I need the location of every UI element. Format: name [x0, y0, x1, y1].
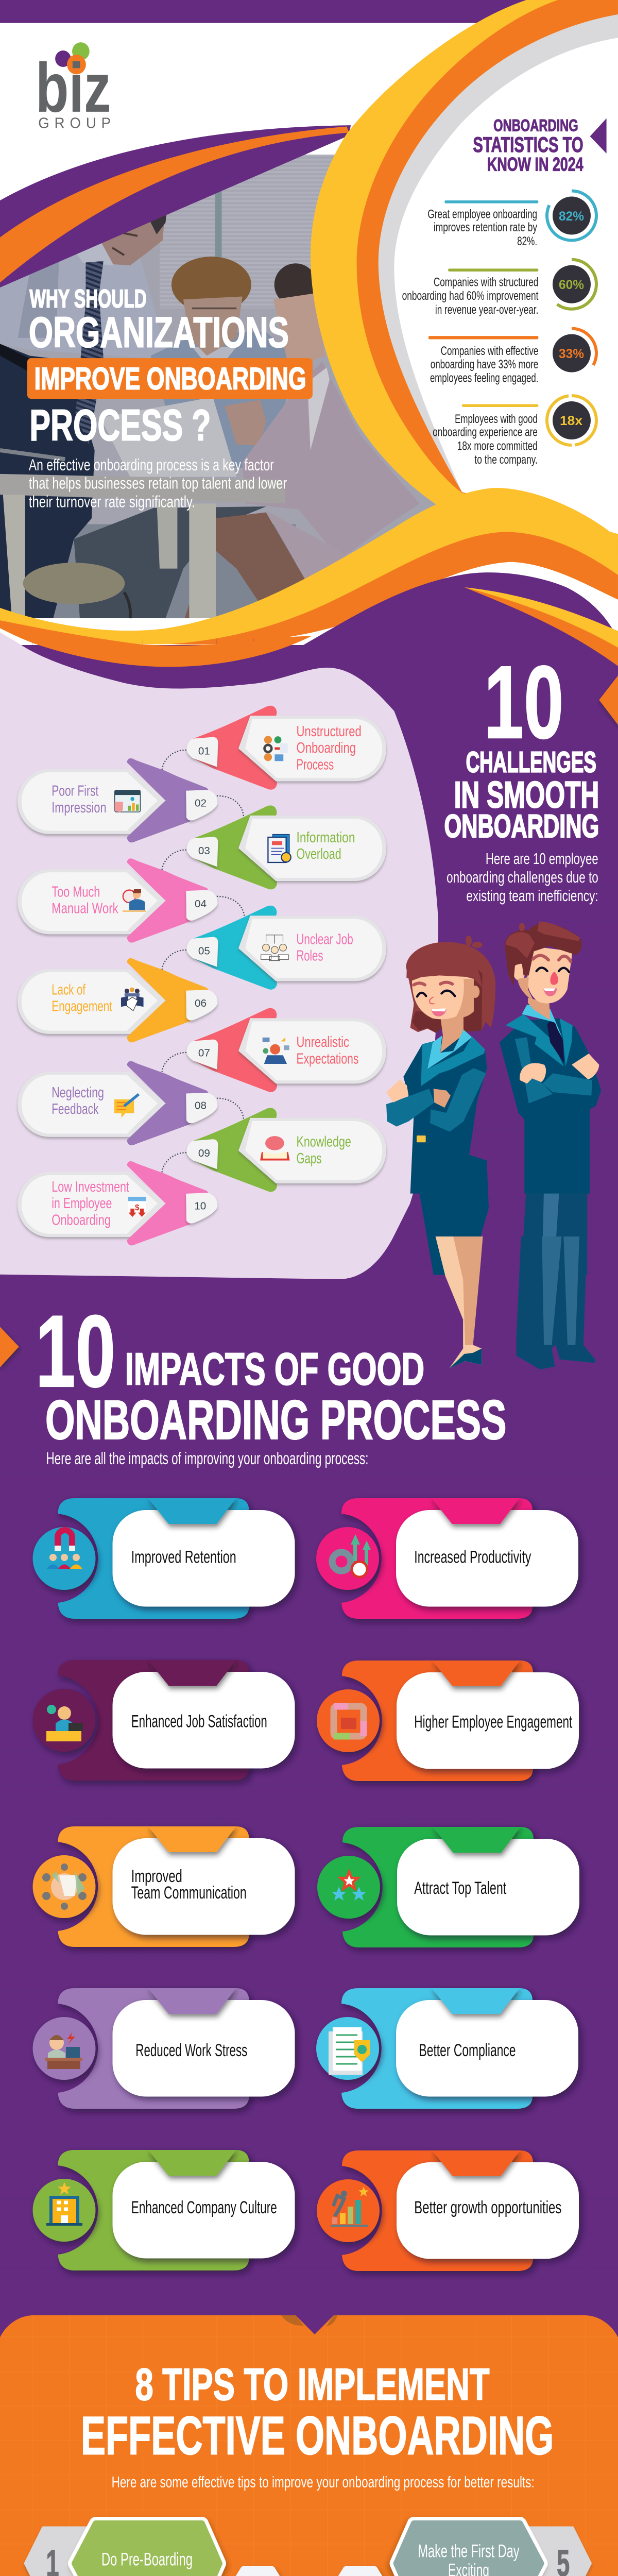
- grey arc: [379, 14, 618, 534]
- challenge 05: 05: [198, 945, 210, 957]
- orange arc: [357, 0, 618, 534]
- challenge 02: [18, 758, 217, 842]
- stat ring 33%: [547, 329, 596, 378]
- stat 1 text: Great employee onboarding: [427, 207, 537, 221]
- card: improved team communication: Improved: [131, 1867, 182, 1886]
- card: better growth opportunities: Better growth opportunities: [414, 2198, 561, 2217]
- section title: 10 impacts of good onboarding process: [36, 1294, 506, 1468]
- challenge 08: Neglecting: [52, 1084, 104, 1101]
- top white mask: [0, 0, 473, 201]
- stats heading: KNOW IN 2024: [487, 154, 583, 175]
- challenge 07: Unrealistic: [297, 1034, 349, 1050]
- white wave: [0, 562, 618, 657]
- card: enhanced company culture: [33, 2150, 295, 2270]
- stat 4 text: to the company.: [474, 453, 538, 466]
- intro text: An effective onboarding process is a key factor: [29, 455, 274, 474]
- challenge 05: Unclear Job: [297, 931, 353, 947]
- hero photo: three colleagues around a laptop: [0, 155, 464, 618]
- stat 2 text: [402, 268, 539, 316]
- stat 2 text: Companies with structured: [434, 275, 538, 289]
- stat 3 text: onboarding have 33% more: [431, 358, 538, 371]
- challenge 04: Too Much: [52, 884, 100, 901]
- challenge 06: [18, 958, 217, 1042]
- challenge 03: Information: [297, 829, 355, 846]
- challenge 07: 07: [198, 1047, 210, 1059]
- stat 4 text: onboarding experience are: [433, 425, 538, 439]
- challenge 07: Expectations: [297, 1050, 358, 1067]
- character lower: woman skirt and man trousers: [414, 1137, 587, 1275]
- stat 3 text: [428, 336, 538, 384]
- orange wave: [169, 532, 618, 657]
- challenge 08: [18, 1061, 217, 1145]
- stat 1 text: improves retention rate by: [434, 220, 537, 234]
- challenge 01: 01: [198, 745, 210, 757]
- challenge 09: Gaps: [297, 1150, 321, 1167]
- card: attract top talent: [317, 1827, 579, 1947]
- card: better compliance: [316, 1988, 578, 2109]
- orange tips section background: [0, 2315, 618, 2576]
- stat ring 33%: 33%: [559, 347, 584, 361]
- challenge 01: Onboarding: [297, 740, 356, 756]
- stat ring 60%: [547, 260, 596, 309]
- stat ring 82%: 82%: [559, 209, 584, 224]
- challenge 03: [186, 805, 386, 889]
- challenge 05: [186, 906, 386, 990]
- intro text: that helps businesses retain top talent and lower: [29, 474, 287, 493]
- yellow wave: [0, 488, 618, 657]
- logo: biz group: GROUP: [38, 115, 111, 131]
- card: better growth opportunities: [317, 2150, 579, 2271]
- challenge 10: $: [135, 1204, 140, 1212]
- card: improved retention: [33, 1498, 295, 1619]
- intro text: [29, 455, 287, 511]
- section title: 10 challenges in smooth onboarding: [444, 645, 599, 844]
- stat ring 18x: 18x: [560, 414, 582, 428]
- purple grid texture: [0, 639, 618, 2315]
- stat 2 text: onboarding had 60% improvement: [402, 289, 539, 302]
- stats heading: ONBOARDING: [493, 116, 578, 134]
- challenge 10: Onboarding: [52, 1212, 111, 1228]
- stat ring 82%: [547, 191, 596, 240]
- purple spike: yellow and orange: [465, 587, 618, 666]
- challenge 09: Knowledge: [297, 1134, 351, 1150]
- challenge 09: [186, 1108, 386, 1192]
- orange left swoosh: [0, 127, 349, 282]
- title: why should organizations improve onboarding process: ORGANIZATIONS: [29, 309, 289, 357]
- hero curves and statistics panel: [0, 0, 618, 657]
- main purple background: [0, 572, 618, 2370]
- challenge 06: 06: [195, 997, 207, 1009]
- title: why should organizations improve onboarding process: IMPROVE ONBOARDING: [35, 361, 306, 396]
- challenge 08: Feedback: [52, 1101, 99, 1117]
- section title: 10 impacts of good onboarding process: IMPACTS OF GOOD: [125, 1343, 424, 1395]
- challenge 09: 09: [198, 1147, 210, 1159]
- title: why should organizations improve onboarding process: WHY SHOULD: [29, 284, 147, 313]
- challenge 10: [18, 1161, 217, 1245]
- tip 5: make the first day exciting: [329, 2523, 590, 2576]
- challenge 08: 08: [195, 1099, 207, 1111]
- card: reduced work stress: Reduced Work Stress: [135, 2041, 247, 2060]
- title: why should organizations improve onboarding process: PROCESS ?: [29, 400, 211, 450]
- impacts header and legs: [0, 1236, 595, 1468]
- card: improved retention: Improved Retention: [131, 1548, 236, 1567]
- orange side marker left: [0, 1327, 19, 1367]
- challenge 03: Overload: [297, 846, 341, 862]
- orange crescent: [0, 620, 312, 667]
- stat 4 text: Employees with good: [455, 412, 538, 426]
- challenges intro text: [447, 850, 598, 905]
- tip 1: do pre-boarding: [26, 2523, 289, 2576]
- yellow arc: [311, 0, 618, 554]
- challenge 02: 02: [195, 797, 207, 809]
- lilac panel: [0, 632, 438, 1279]
- stat ring 60%: 60%: [559, 278, 584, 292]
- orange grid texture: [0, 2315, 618, 2576]
- challenge 03: 03: [198, 845, 210, 857]
- challenge 02: Impression: [52, 800, 107, 816]
- challenge 02: Poor First: [52, 783, 98, 800]
- connector dots: [162, 750, 244, 1173]
- card: increased productivity: [316, 1498, 578, 1619]
- orange side marker right: [599, 675, 618, 725]
- section title: 10 challenges in smooth onboarding: 10: [484, 645, 563, 760]
- purple left swoosh: [0, 125, 351, 287]
- challenge 04: [18, 858, 217, 943]
- card: increased productivity: Increased Productivity: [414, 1548, 531, 1567]
- card: enhanced company culture: Enhanced Company Culture: [131, 2198, 277, 2217]
- challenge 10: in Employee: [52, 1195, 112, 1212]
- top purple bar: [0, 0, 552, 23]
- section title: 10 impacts of good onboarding process: 10: [36, 1294, 115, 1409]
- man: [500, 921, 601, 1194]
- characters: woman and man in suits: [386, 921, 601, 1194]
- challenge 01: Unstructured: [297, 723, 362, 740]
- card: enhanced job satisfaction: [33, 1660, 295, 1781]
- intro text: their turnover rate significantly.: [29, 493, 195, 511]
- stat 3 text: employees feeling engaged.: [430, 371, 538, 384]
- white stats area: [394, 38, 618, 534]
- challenges section: [0, 620, 618, 1279]
- challenge 07: [186, 1008, 386, 1092]
- woman: [386, 936, 495, 1194]
- card: improved team communication: Team Communication: [131, 1883, 247, 1903]
- notch shadow: [281, 2315, 337, 2327]
- challenge 06: Engagement: [52, 998, 112, 1014]
- stat 1 text: [427, 200, 538, 248]
- challenge 06: Lack of: [52, 981, 86, 998]
- challenge 05: Roles: [297, 948, 323, 964]
- challenge 10: 10: [194, 1200, 206, 1212]
- tip 1: do pre-boarding: Do Pre-Boarding: [101, 2550, 193, 2570]
- stat 3 text: Companies with effective: [441, 344, 538, 358]
- stat 4 text: [433, 404, 538, 466]
- tip 5: make the first day exciting: Make the First Day: [418, 2541, 520, 2562]
- card: enhanced job satisfaction: Enhanced Job Satisfaction: [131, 1712, 267, 1732]
- challenge 01: Process: [297, 756, 334, 773]
- card: reduced work stress: [33, 1988, 295, 2109]
- stat 1 text: 82%.: [517, 234, 537, 248]
- logo: biz group: biz: [36, 49, 111, 127]
- title: why should organizations improve onboarding process: [27, 284, 313, 450]
- section title: 10 impacts of good onboarding process: Here are all the impacts of improving your onboarding process:: [46, 1449, 369, 1468]
- stats heading: [473, 116, 606, 175]
- tips title: [81, 2360, 554, 2491]
- card: higher employee engagement: [317, 1660, 579, 1781]
- challenge 04: Manual Work: [52, 901, 118, 917]
- card: improved team communication: [33, 1826, 295, 1947]
- challenge 04: 04: [195, 898, 207, 910]
- stat ring 18x: [547, 396, 596, 445]
- card: attract top talent: Attract Top Talent: [414, 1878, 507, 1898]
- card: better compliance: Better Compliance: [419, 2041, 516, 2060]
- stat 2 text: in revenue year-over-year.: [435, 303, 538, 316]
- stat 4 text: 18x more committed: [457, 439, 538, 453]
- challenge 10: Low Investment: [52, 1179, 129, 1195]
- challenge 01: [186, 706, 386, 790]
- character legs and shoes: [436, 1236, 595, 1369]
